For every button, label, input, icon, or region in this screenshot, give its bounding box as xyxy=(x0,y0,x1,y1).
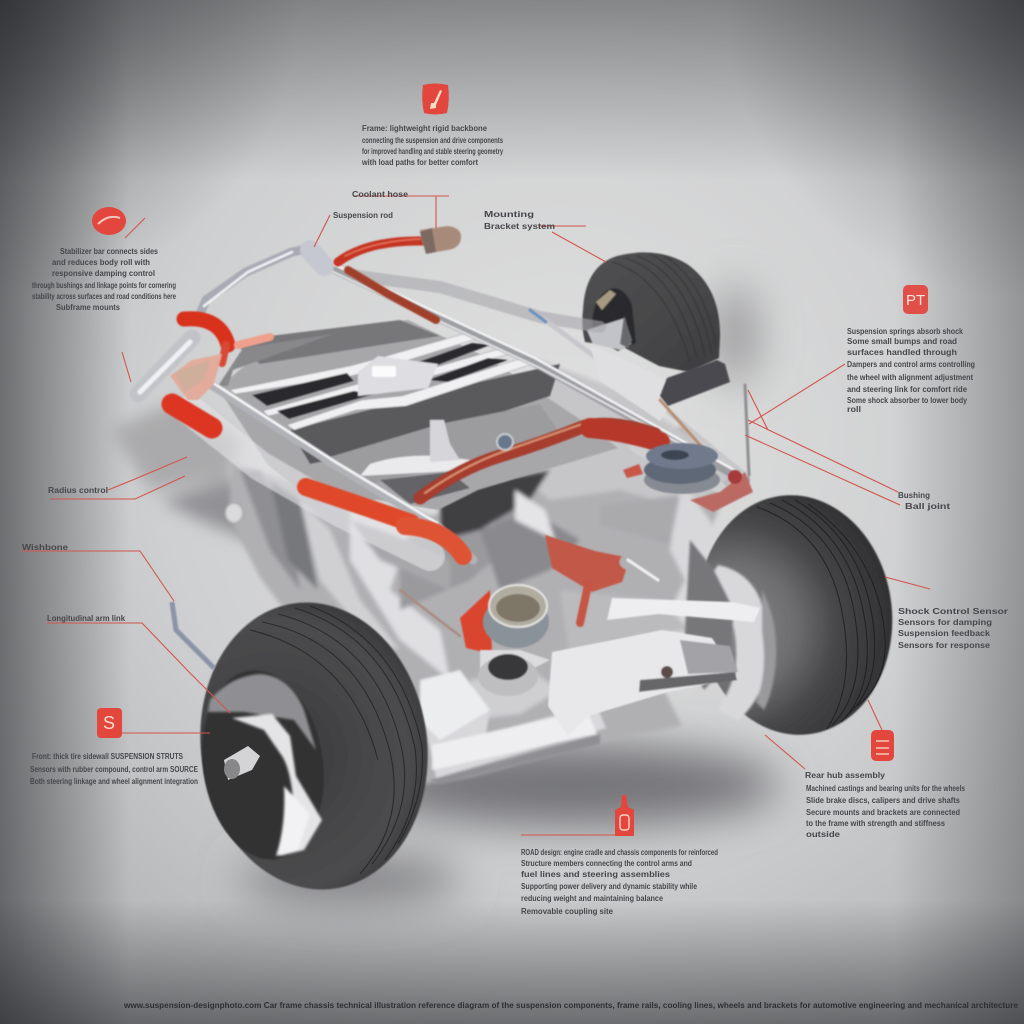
icon: left top badge xyxy=(92,207,126,235)
text: bottom centre block: ROAD design: engine cradle and chassis components for reinforced xyxy=(521,848,718,857)
red hoses xyxy=(170,226,666,654)
text: right block: roll xyxy=(847,405,861,414)
hose: top connector xyxy=(338,226,461,262)
icon: right badge: PT xyxy=(906,292,925,309)
lower body bars xyxy=(225,503,606,784)
text: right block: surfaces handled through xyxy=(847,348,957,357)
text: lower right block: Secure mounts and brackets are connected xyxy=(806,808,960,817)
icon: bottom centre badge xyxy=(615,795,634,836)
text: lower right block: outside xyxy=(806,830,841,839)
text: right lower block: Sensors for damping xyxy=(898,618,992,627)
text: left labels: Longitudinal arm link xyxy=(47,614,126,623)
text: upper left block: Subframe mounts xyxy=(56,303,121,312)
text: bottom centre block: Structure members connecting the control arms and xyxy=(521,859,692,868)
shock absorber xyxy=(478,585,550,696)
text: bottom centre block: Supporting power delivery and dynamic stability while xyxy=(521,882,697,891)
hose: lower left xyxy=(172,404,212,428)
grille bars xyxy=(230,333,532,430)
text: bottom centre block: fuel lines and steering assemblies xyxy=(521,870,671,879)
text: right block: and steering link for comfort ride xyxy=(847,385,968,394)
text: right labels: Ball joint xyxy=(905,502,950,511)
text: lower left block: Both steering linkage and wheel alignment integration xyxy=(30,777,198,786)
text: right lower block: Suspension feedback xyxy=(898,629,991,638)
text: top block: with load paths for better comfort xyxy=(361,158,478,167)
text: right labels xyxy=(898,491,950,511)
text: bottom centre block: Removable coupling site xyxy=(521,907,614,916)
connector bracket near front left tyre xyxy=(172,602,214,668)
text: right lower block: Sensors for response xyxy=(898,641,991,650)
front right suspension arm xyxy=(548,598,760,736)
icon: lower left badge xyxy=(97,708,122,738)
text: top block: connecting the suspension and drive components xyxy=(362,136,503,145)
text: top labels xyxy=(333,190,555,231)
text: lower right block: Slide brake discs, calipers and drive shafts xyxy=(806,796,961,805)
text: lower right block: to the frame with strength and stiffness xyxy=(806,819,946,828)
text: upper left block xyxy=(32,247,176,312)
ground shadow xyxy=(110,285,780,906)
engine deck xyxy=(218,320,618,510)
text: bottom centre block: reducing weight and maintaining balance xyxy=(521,894,663,903)
text: upper left block: Stabilizer bar connects sides xyxy=(60,247,158,256)
hose: upper left xyxy=(170,319,270,400)
text: top labels: Bracket system xyxy=(484,222,555,231)
text: lower right block xyxy=(805,771,965,839)
text: upper left block: through bushings and linkage points for cornering xyxy=(32,281,176,290)
text: lower right block: Machined castings and bearing units for the wheels xyxy=(806,784,965,793)
text: right labels: Bushing xyxy=(898,491,930,500)
text: top block xyxy=(361,124,503,167)
text: right block: Suspension springs absorb shock xyxy=(847,327,963,336)
text: upper left block: responsive damping control xyxy=(52,269,155,278)
hose: centre red xyxy=(306,487,463,556)
text: bottom centre block xyxy=(521,848,718,916)
front left tyre xyxy=(182,588,446,904)
hose: middle brick xyxy=(420,423,660,498)
text: right block: Some shock absorber to lower body xyxy=(847,396,967,405)
silver frame rails xyxy=(138,248,749,560)
text: right lower block xyxy=(898,607,1008,650)
text: top labels: Coolant hose xyxy=(352,190,409,199)
hose: lower block xyxy=(460,535,666,654)
text: left labels: Radius control xyxy=(48,486,108,495)
text: lower left block: Front: thick tire sidewall SUSPENSION STRUTS xyxy=(32,752,184,761)
text: top labels: Suspension rod xyxy=(333,211,393,220)
front right tyre xyxy=(684,486,904,744)
icon: lower left badge: S xyxy=(103,713,115,733)
chassis body xyxy=(229,360,740,788)
text: lower right block: Rear hub assembly xyxy=(805,771,886,780)
text: top block: Frame: lightweight rigid backbone xyxy=(362,124,488,133)
text: top labels: Mounting xyxy=(484,210,534,219)
rear right tyre xyxy=(582,252,720,372)
icon: lower right badge xyxy=(871,730,894,761)
text: left labels: Wishbone xyxy=(22,543,69,552)
icon: top wrench badge xyxy=(422,84,449,114)
text: top block: for improved handling and stable steering geometry xyxy=(362,147,503,156)
text: lower left block xyxy=(30,752,199,786)
text: right block xyxy=(847,327,975,414)
text: footer: www.suspension-designphoto.com Car frame chassis technical illustration reference diagram of the suspension components, frame rails, cooling lines, wheels and brackets for automotive engineering and mechanical architecture xyxy=(123,1001,1019,1010)
icon: right badge xyxy=(903,285,928,314)
text: right block: Dampers and control arms controlling xyxy=(847,360,975,369)
text: upper left block: and reduces body roll with xyxy=(52,258,150,267)
text: right lower block: Shock Control Sensor xyxy=(898,607,1008,616)
text: lower left block: Sensors with rubber compound, control arm SOURCE xyxy=(30,765,199,774)
text: upper left block: stability across surfaces and road conditions here xyxy=(32,292,176,301)
red leader lines xyxy=(22,196,930,835)
dark fender piece xyxy=(660,360,730,406)
text: right block: Some small bumps and road xyxy=(847,337,957,346)
blue-grey mount xyxy=(497,434,753,512)
text: left labels xyxy=(22,486,126,623)
text: right block: the wheel with alignment adjustment xyxy=(847,373,973,382)
